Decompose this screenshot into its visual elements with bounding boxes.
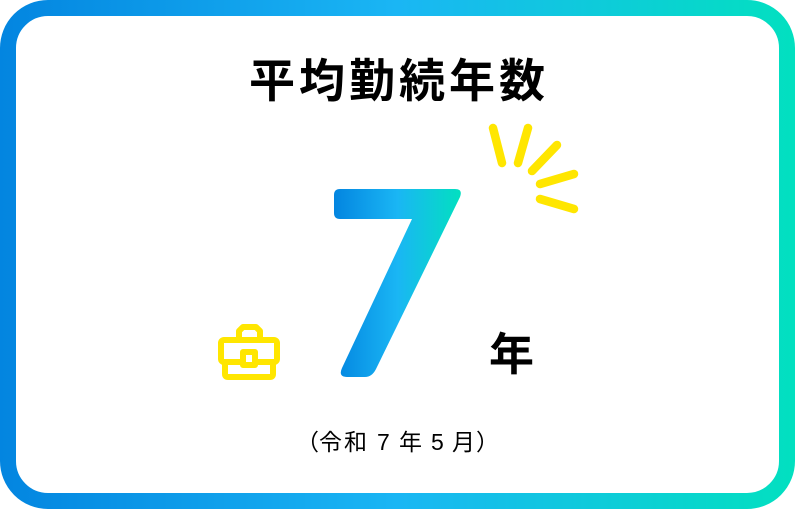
date caption: ） [476, 429, 499, 455]
date caption: 7 [377, 429, 390, 455]
date caption: 月 [452, 429, 475, 455]
icon: briefcase [221, 327, 277, 377]
title: 平均勤続年数 [249, 55, 549, 107]
date caption: 令 [319, 429, 342, 455]
unit: year: 年 [489, 329, 534, 380]
big number 7 [334, 189, 461, 377]
date caption: （ [296, 429, 319, 455]
icon: sparkle lines [493, 128, 574, 209]
date caption: 5 [431, 429, 444, 455]
date caption: 和 [344, 429, 367, 455]
date caption: 年 [399, 429, 422, 455]
